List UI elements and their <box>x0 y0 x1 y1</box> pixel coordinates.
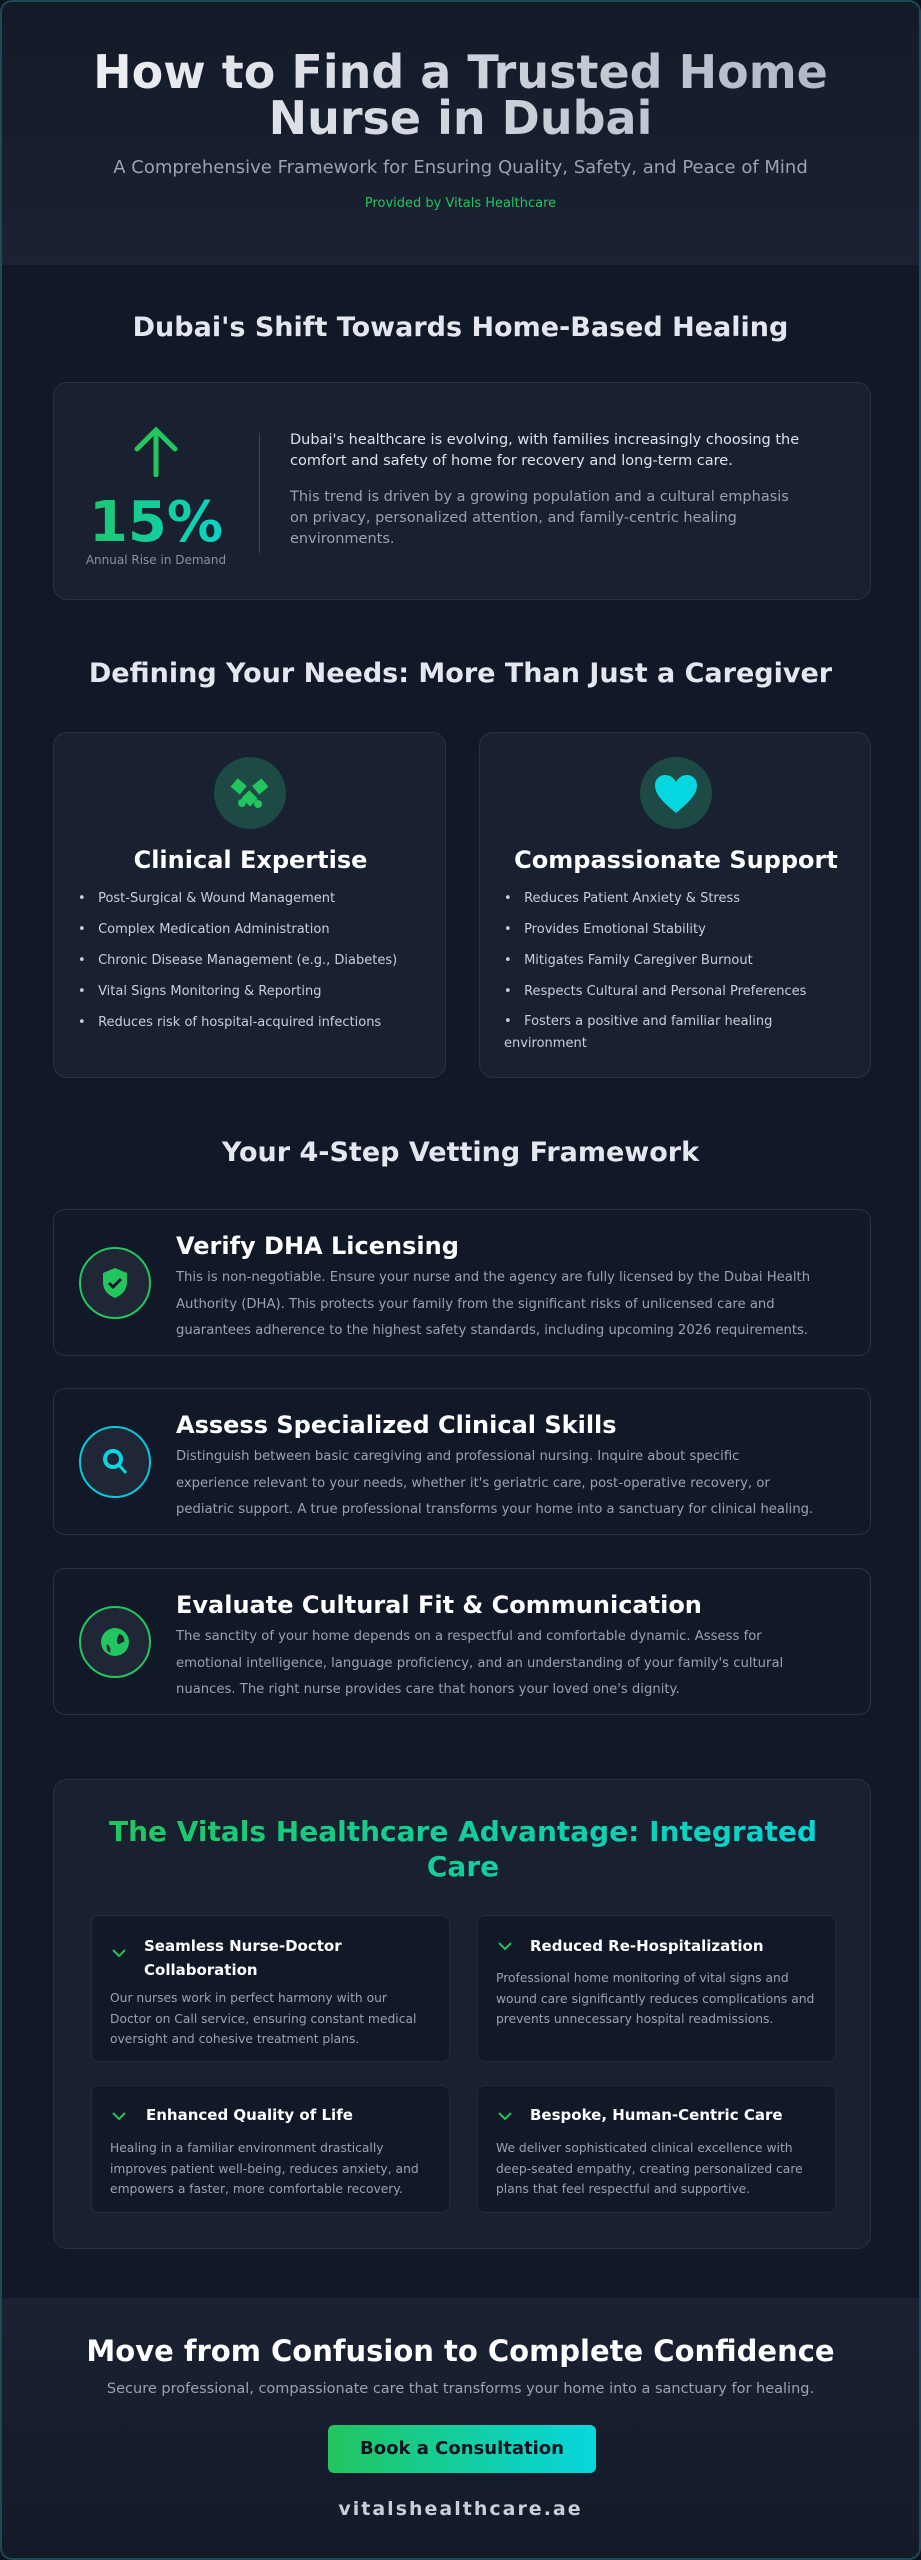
benefit 4: Bespoke, Human-Centric Care <box>530 2106 783 2124</box>
title: How to Find a Trusted Home <box>93 45 828 99</box>
button: Book a Consultation <box>360 2438 564 2459</box>
benefit 1: Doctor on Call service, ensuring constant medical <box>110 2012 416 2026</box>
panel: clinical expertise <box>53 732 446 1078</box>
panel: stat card: This trend is driven by a growing population and a cultural emphasis <box>290 489 789 505</box>
panel: advantage <box>53 1779 871 2249</box>
website url: vitalshealthcare.ae <box>338 2498 583 2520</box>
panel: stat card <box>53 382 871 600</box>
icon: up arrow <box>134 426 178 477</box>
bullet list: • Mitigates Family Caregiver Burnout <box>504 953 753 968</box>
step body <box>176 1449 813 1517</box>
benefit 2 <box>477 1915 836 2062</box>
panel: stat card: on privacy, personalized attention, and family-centric healing <box>290 510 737 526</box>
bullet list: • Reduces risk of hospital-acquired infections <box>78 1015 381 1030</box>
icon: magnifier <box>79 1426 151 1498</box>
benefit 2: Professional home monitoring of vital signs and wound care significantly reduces complications and prevents unnecessary hospital readmissions. <box>496 1971 814 2026</box>
step body <box>176 1629 783 1697</box>
benefit 4 <box>477 2085 836 2213</box>
title <box>2 49 919 141</box>
bullet list: • Provides Emotional Stability <box>504 922 706 937</box>
bullet list: • Fosters a positive and familiar healing environment <box>504 1014 772 1051</box>
step body: Distinguish between basic caregiving and professional nursing. Inquire about specific <box>176 1449 739 1464</box>
panel: compassionate support <box>479 732 871 1078</box>
step body: This is non-negotiable. Ensure your nurse and the agency are fully licensed by the Dubai Health Authority (DHA). This protects your family from the significant risks of unlicensed care and guarantees adherence to the highest safety standards, including upcoming 2026 requirements. <box>176 1270 810 1338</box>
step body: The sanctity of your home depends on a respectful and comfortable dynamic. Assess for <box>176 1629 762 1644</box>
bullet list: • Chronic Disease Management (e.g., Diabetes) <box>78 953 397 968</box>
step 2 <box>53 1388 871 1535</box>
benefit 3: Healing in a familiar environment drastically improves patient well-being, reduces anxiety, and empowers a faster, more comfortable recovery. <box>110 2141 419 2196</box>
benefit 1 <box>91 1915 450 2062</box>
bullet list <box>504 891 806 1051</box>
advantage title: The Vitals Healthcare Advantage: Integrated Care <box>109 1815 817 1883</box>
benefit 3: Enhanced Quality of Life <box>146 2106 353 2124</box>
stat 15%: 15% <box>89 490 223 555</box>
text block: Dubai's healthcare is evolving, with families increasingly choosing the comfort and safety of home for recovery and long-term care. <box>290 432 799 469</box>
benefit 3 <box>91 2085 450 2213</box>
step title: Verify DHA Licensing <box>176 1232 459 1260</box>
bullet list: • Respects Cultural and Personal Preferences <box>504 984 806 999</box>
step body: pediatric support. A true professional transforms your home into a sanctuary for clinical healing. <box>176 1502 813 1517</box>
stat label: Annual Rise in Demand <box>86 553 226 567</box>
bullet list: • Post-Surgical & Wound Management <box>78 891 335 906</box>
heading: shift: Dubai's Shift Towards Home-Based Healing <box>133 312 788 343</box>
subtitle: A Comprehensive Framework for Ensuring Quality, Safety, and Peace of Mind <box>113 157 808 178</box>
step body: emotional intelligence, language proficiency, and an understanding of your family's cultural <box>176 1656 783 1670</box>
benefit 1: oversight and cohesive treatment plans. <box>110 2032 359 2046</box>
provider credit: Provided by Vitals Healthcare <box>365 196 556 211</box>
bullet list: • Vital Signs Monitoring & Reporting <box>78 984 321 999</box>
icon: medical tools <box>214 757 286 829</box>
step body: nuances. The right nurse provides care that honors your loved one's dignity. <box>176 1682 680 1697</box>
step body: experience relevant to your needs, whether it's geriatric care, post-operative recovery, or <box>176 1476 770 1490</box>
button <box>328 2425 596 2473</box>
benefit 2: Reduced Re-Hospitalization <box>530 1937 764 1955</box>
benefit 1: Our nurses work in perfect harmony with our <box>110 1991 387 2005</box>
footer CTA <box>2 2298 919 2560</box>
card title: Compassionate Support <box>514 846 838 874</box>
CTA subtext: Secure professional, compassionate care that transforms your home into a sanctuary for healing. <box>107 2381 814 2397</box>
step 3 <box>53 1568 871 1715</box>
bullet list: • Reduces Patient Anxiety & Stress <box>504 891 740 906</box>
heading: vetting: Your 4-Step Vetting Framework <box>222 1137 699 1168</box>
card title: Clinical Expertise <box>134 846 367 874</box>
benefit 4: We deliver sophisticated clinical excellence with deep-seated empathy, creating personalized care plans that feel respectful and supportive. <box>496 2141 803 2196</box>
step title: Assess Specialized Clinical Skills <box>176 1411 617 1439</box>
benefit 1: Seamless Nurse-Doctor Collaboration <box>144 1937 342 1979</box>
step title: Evaluate Cultural Fit & Communication <box>176 1591 702 1619</box>
title: Nurse in Dubai <box>269 91 652 145</box>
panel: stat card: environments. <box>290 531 395 547</box>
icon: globe <box>79 1606 151 1678</box>
CTA heading: Move from Confusion to Complete Confidence <box>86 2334 835 2368</box>
header <box>2 2 919 265</box>
heading: needs: Defining Your Needs: More Than Just a Caregiver <box>89 658 832 689</box>
bullet list: • Complex Medication Administration <box>78 922 330 937</box>
icon: heart <box>640 757 712 829</box>
icon: shield <box>79 1247 151 1319</box>
bullet list <box>78 891 397 1030</box>
step 1 <box>53 1209 871 1356</box>
